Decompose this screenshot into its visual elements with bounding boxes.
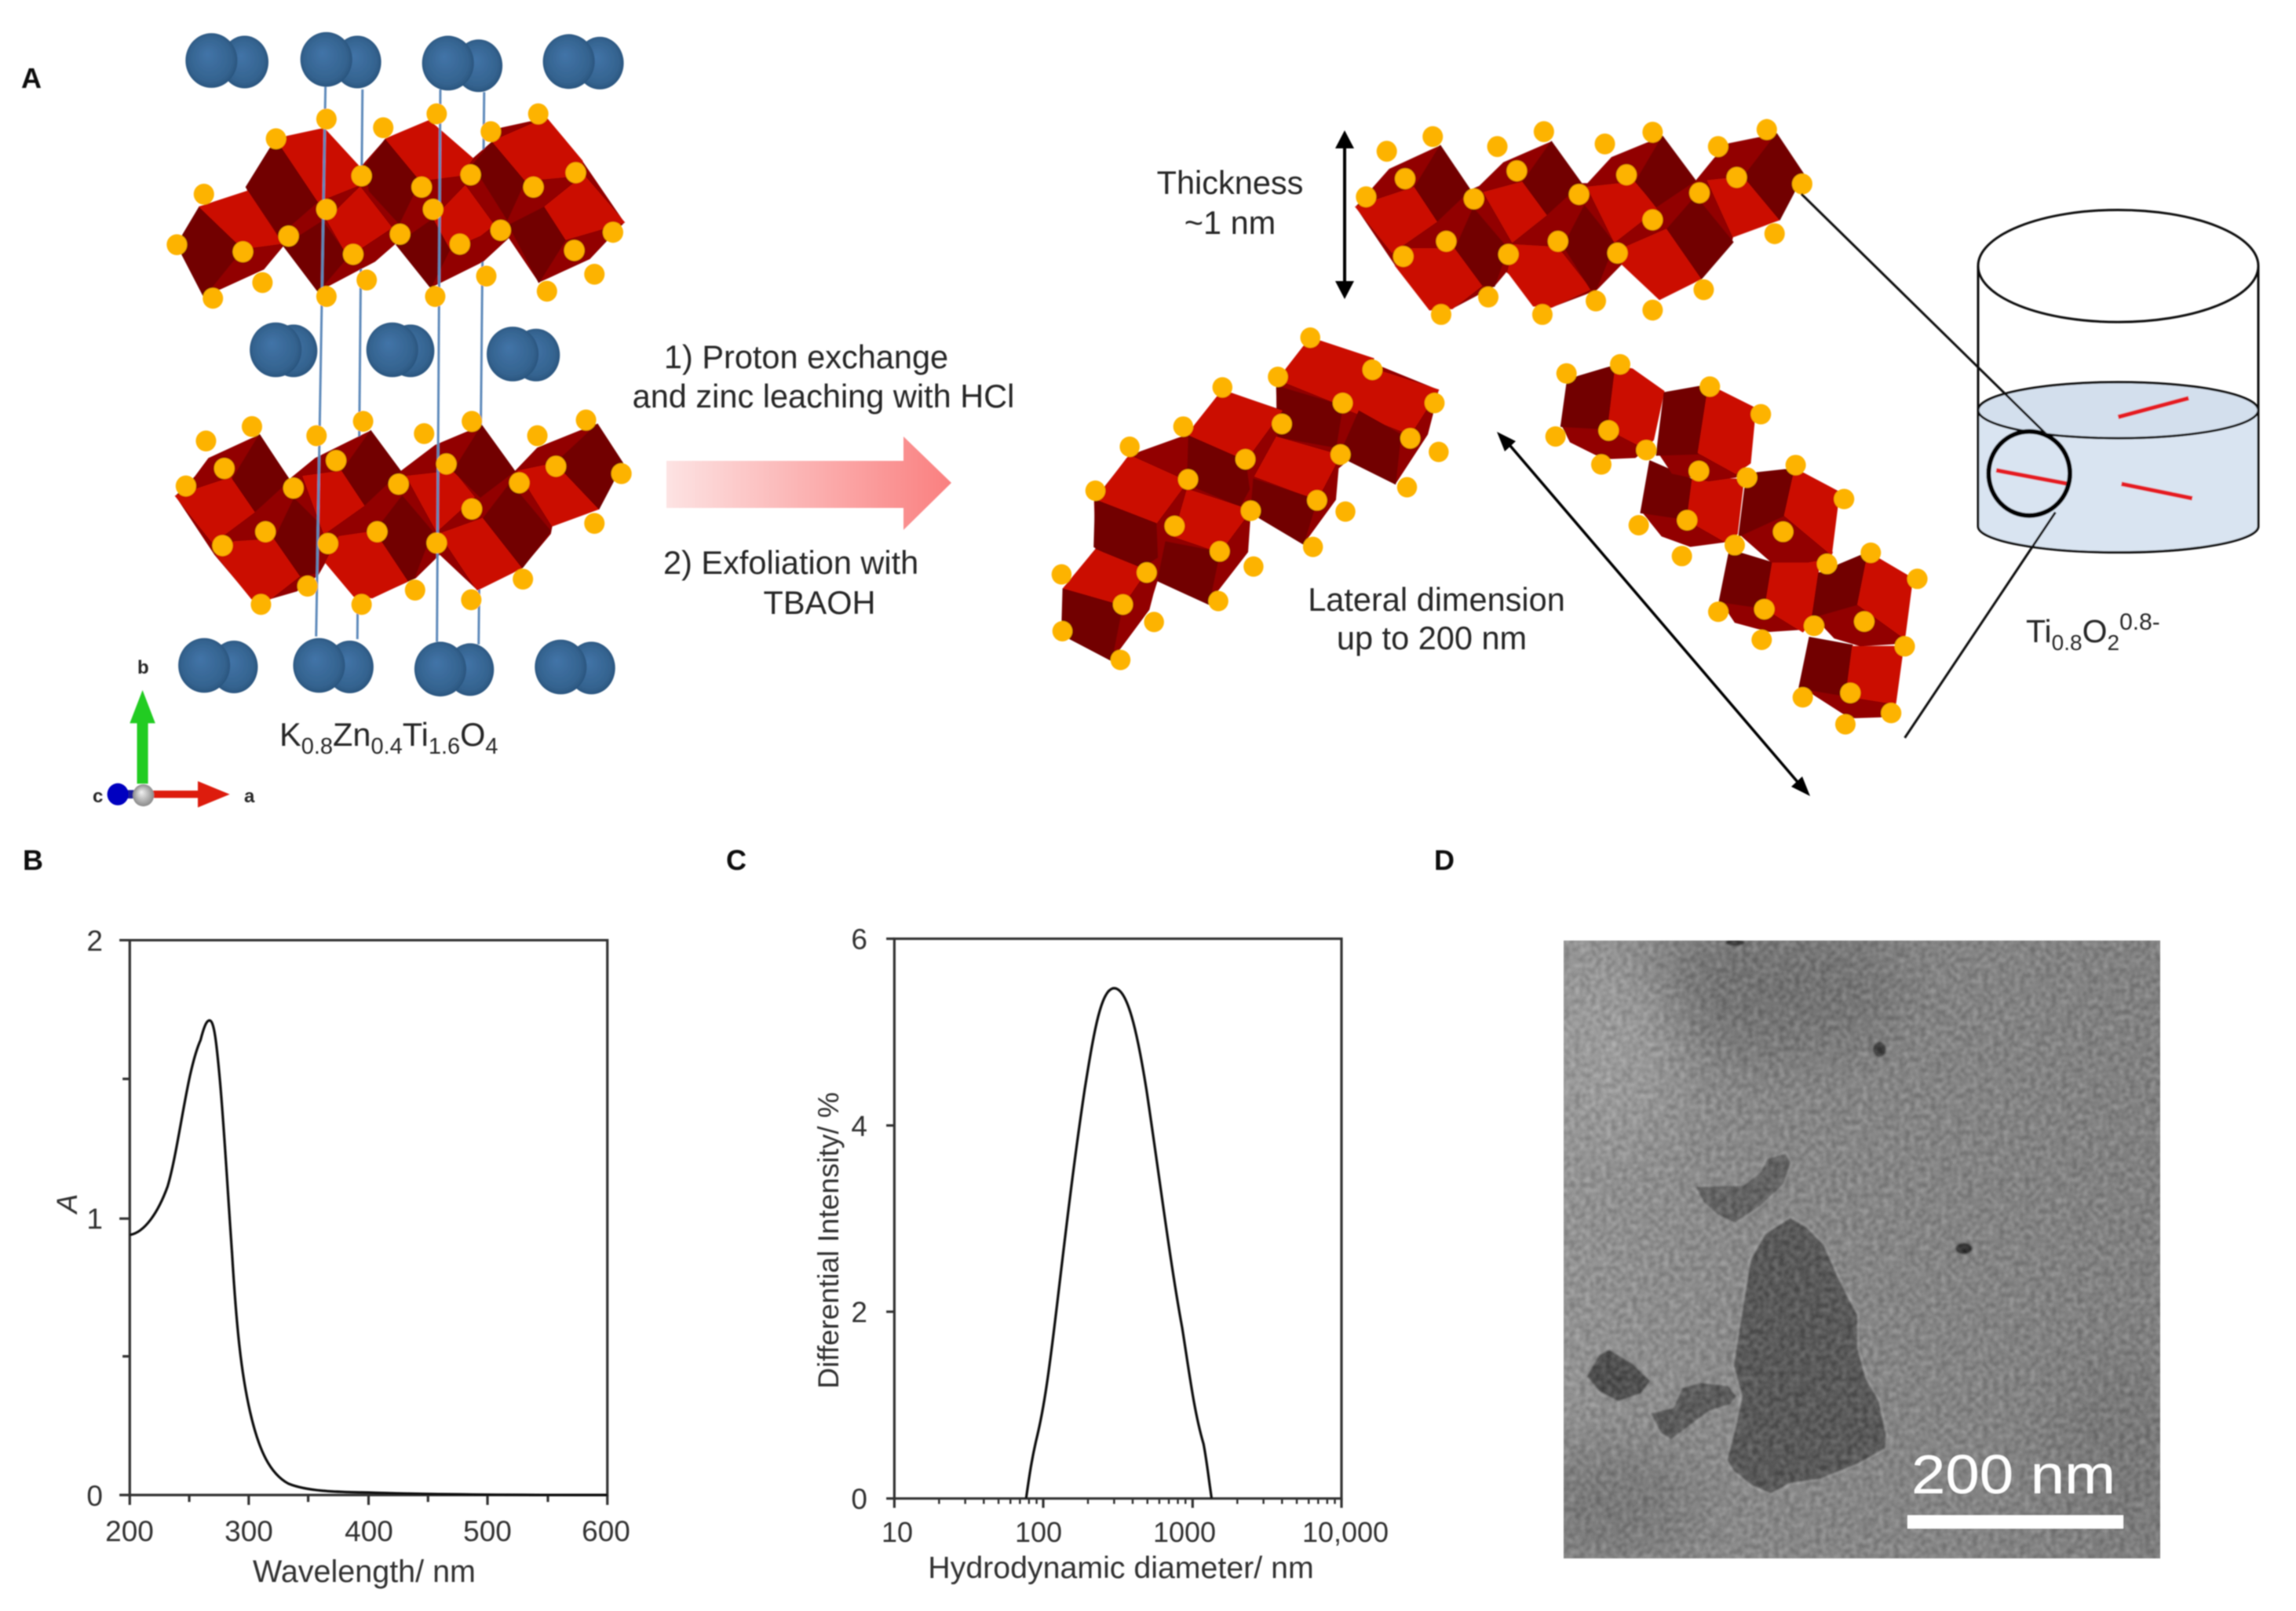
TEM image xyxy=(1563,939,2161,1559)
step 2 text xyxy=(663,544,918,621)
formula K0.8Zn0.4Ti1.6O4: Zn xyxy=(333,716,370,753)
formula Ti0.8O2 0.8-: Ti xyxy=(2026,613,2052,649)
axis letter c: c xyxy=(93,786,103,807)
formula Ti0.8O2 0.8-: 0.8- xyxy=(2119,609,2160,635)
panel label B: B xyxy=(23,844,43,876)
x tick labels: 500 xyxy=(463,1515,512,1547)
x tick labels: 1000 xyxy=(1153,1516,1216,1548)
intensity curve xyxy=(1026,988,1212,1499)
y tick labels: 1 xyxy=(86,1203,103,1235)
formula Ti0.8O2 0.8-: 2 xyxy=(2107,630,2119,655)
formula K0.8Zn0.4Ti1.6O4: 0.8 xyxy=(301,734,333,759)
chart frame and ticks xyxy=(119,941,608,1505)
x tick labels: 10,000 xyxy=(1302,1516,1389,1548)
x tick labels: 100 xyxy=(1015,1516,1062,1548)
thickness label: Thickness xyxy=(1157,164,1303,201)
top octahedra layer xyxy=(177,118,625,297)
y tick labels: 6 xyxy=(851,923,867,955)
chart frame and ticks xyxy=(886,939,1341,1508)
crystal axes indicator xyxy=(108,690,230,807)
nanosheet: left ribbon xyxy=(1052,327,1449,670)
x axis title: Hydrodynamic diameter/ nm xyxy=(928,1551,1314,1585)
panel B: UV-vis spectrum xyxy=(23,844,630,1589)
y tick labels: 4 xyxy=(851,1110,867,1142)
liquid xyxy=(1978,412,2258,553)
y tick labels: 2 xyxy=(86,925,103,957)
axis letter a: a xyxy=(244,786,255,807)
step 2 text: TBAOH xyxy=(764,584,875,621)
panel C: size distribution xyxy=(726,844,1389,1585)
x tick labels: 400 xyxy=(345,1515,393,1547)
nanosheet: right ribbon xyxy=(1546,354,1928,735)
formula K0.8Zn0.4Ti1.6O4: 4 xyxy=(485,734,498,759)
formula K0.8Zn0.4Ti1.6O4: K xyxy=(279,716,301,753)
x tick labels: 300 xyxy=(224,1515,273,1547)
beaker walls xyxy=(1978,266,2258,412)
y axis title: A xyxy=(51,1194,83,1215)
panel label A: A xyxy=(21,62,42,94)
panel label C: C xyxy=(726,844,746,876)
scale bar label: 200 nm xyxy=(1911,1444,2115,1505)
magnifier circle xyxy=(1988,431,2070,516)
beaker rim xyxy=(1978,210,2258,322)
lateral dimension label xyxy=(1308,581,1565,656)
panel label D: D xyxy=(1434,844,1455,876)
step 1 text xyxy=(633,338,1014,415)
layered crystal structure K0.8Zn0.4Ti1.6O4 xyxy=(166,32,632,696)
absorbance curve xyxy=(130,1021,608,1495)
process arrow xyxy=(666,437,951,530)
y axis title: Differential Intensity/ % xyxy=(812,1092,845,1389)
y tick labels xyxy=(86,925,103,1512)
scale bar xyxy=(1907,1515,2123,1529)
formula Ti0.8O2 0.8-: O xyxy=(2082,613,2107,649)
thickness double arrow xyxy=(1335,130,1354,299)
formula K0.8Zn0.4Ti1.6O4: Ti xyxy=(403,716,429,753)
step 1 text: and zinc leaching with HCl xyxy=(633,378,1014,415)
formula K0.8Zn0.4Ti1.6O4: O xyxy=(460,716,485,753)
x tick labels xyxy=(105,1515,630,1547)
oxygen atoms xyxy=(166,104,632,615)
y tick labels: 0 xyxy=(86,1480,103,1512)
magnifier connecting lines xyxy=(1801,194,2055,738)
thickness label: ~1 nm xyxy=(1185,204,1276,241)
x tick labels: 600 xyxy=(582,1515,630,1547)
lateral dimension double arrow xyxy=(1497,432,1810,796)
exfoliated flakes xyxy=(1586,940,1972,1494)
axis letter b: b xyxy=(137,657,149,678)
thickness label xyxy=(1157,164,1303,241)
y tick labels xyxy=(851,923,867,1515)
panel D: TEM micrograph xyxy=(1434,844,2190,1570)
x axis title: Wavelength/ nm xyxy=(253,1554,476,1589)
suspended sheets xyxy=(1996,398,2192,499)
y tick labels: 0 xyxy=(851,1483,867,1515)
x tick labels xyxy=(882,1516,1389,1548)
x tick labels: 200 xyxy=(105,1515,154,1547)
step 1 text: 1) Proton exchange xyxy=(664,338,948,375)
beaker with nanosheet dispersion xyxy=(1801,194,2258,738)
formula K0.8Zn0.4Ti1.6O4: 0.4 xyxy=(370,734,403,759)
y tick labels: 2 xyxy=(851,1296,867,1328)
nanosheet: top ribbon xyxy=(1356,119,1812,325)
liquid surface xyxy=(1978,382,2258,438)
lateral dimension label: Lateral dimension xyxy=(1308,581,1565,618)
formula Ti0.8O2 0.8-: 0.8 xyxy=(2052,630,2082,655)
x tick labels: 10 xyxy=(882,1516,913,1548)
panel A: synthesis schematic xyxy=(21,32,2258,807)
formula K0.8Zn0.4Ti1.6O4: 1.6 xyxy=(429,734,460,759)
bottom octahedra layer xyxy=(175,424,623,599)
lateral dimension label: up to 200 nm xyxy=(1337,619,1527,656)
step 2 text: 2) Exfoliation with xyxy=(663,544,918,581)
